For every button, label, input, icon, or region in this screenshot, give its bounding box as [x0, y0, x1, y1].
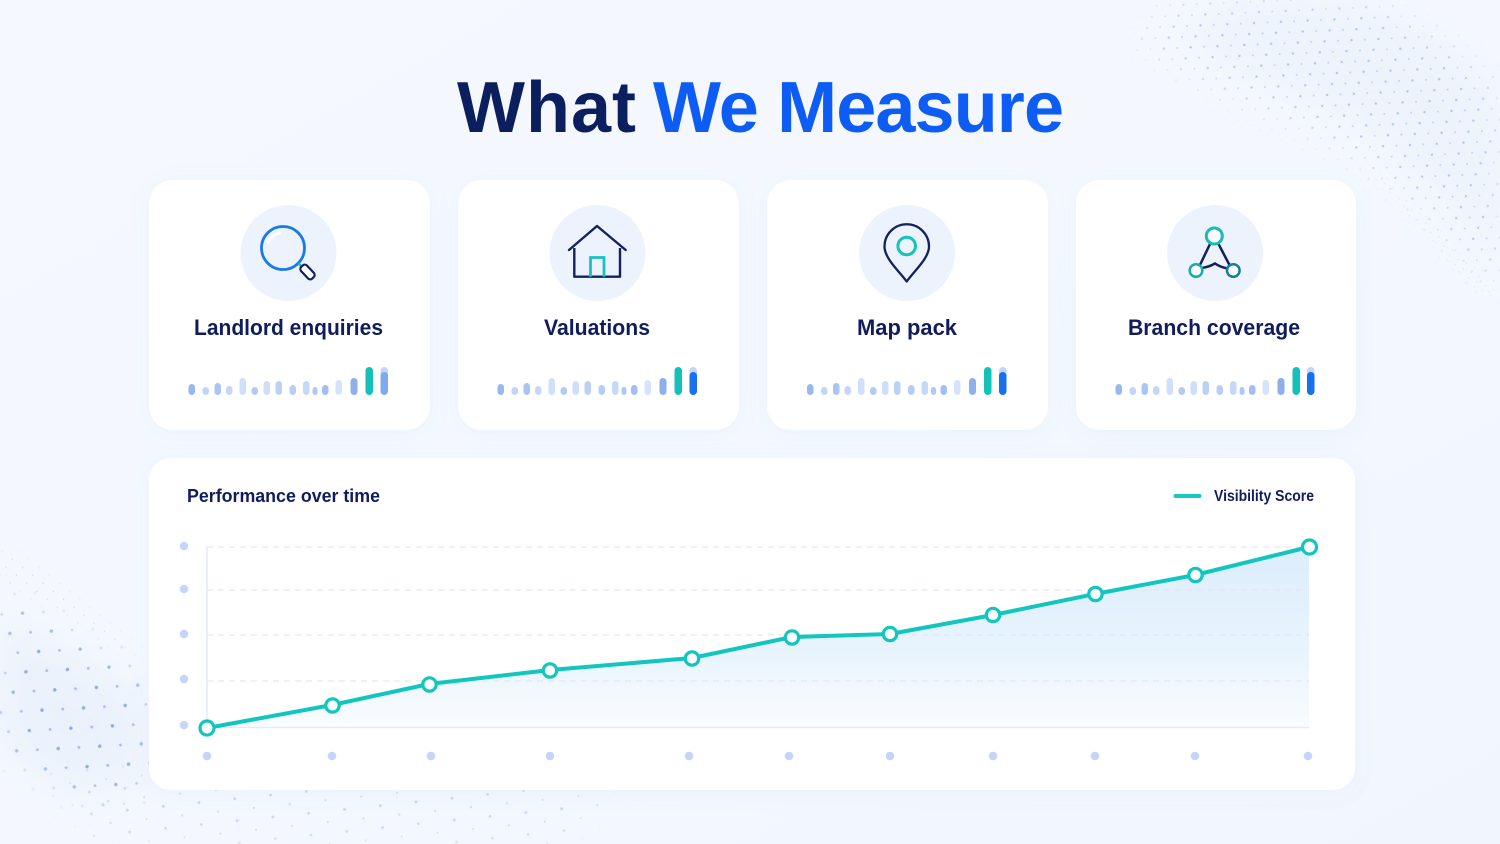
title: What [457, 68, 636, 148]
panel: performance over time [149, 458, 1355, 790]
icon: map pin [859, 205, 955, 301]
panel: valuations [458, 180, 739, 430]
icon: network nodes [1167, 205, 1263, 301]
panel: landlord enquiries [149, 180, 430, 430]
icon: house [550, 205, 646, 301]
mini bar chart [1116, 367, 1314, 395]
area fill [207, 547, 1309, 728]
title: We Measure [653, 68, 1064, 148]
mini bar chart [498, 367, 697, 395]
label: branch coverage: Branch coverage [1128, 315, 1300, 340]
visibility score line [207, 547, 1309, 728]
chart heading: Performance over time [187, 486, 380, 506]
label: valuations: Valuations [544, 315, 650, 340]
mini bar chart [807, 367, 1006, 395]
y axis ticks [180, 542, 188, 729]
legend: visibility score: Visibility Score [1214, 488, 1314, 505]
panel: branch coverage [1076, 180, 1356, 430]
icon: magnifying glass [240, 205, 336, 301]
panel: map pack [767, 180, 1048, 430]
data point markers [200, 540, 1316, 735]
title [457, 68, 1064, 148]
line chart [180, 540, 1317, 760]
label: map pack: Map pack [857, 315, 958, 340]
label: landlord enquiries: Landlord enquiries [194, 315, 383, 340]
decorative dot wave: top right [1128, 0, 1500, 296]
legend: visibility score [1176, 488, 1314, 505]
decorative dot wave: bottom left [0, 530, 800, 844]
mini bar chart [188, 367, 388, 395]
x axis ticks [203, 752, 1312, 760]
